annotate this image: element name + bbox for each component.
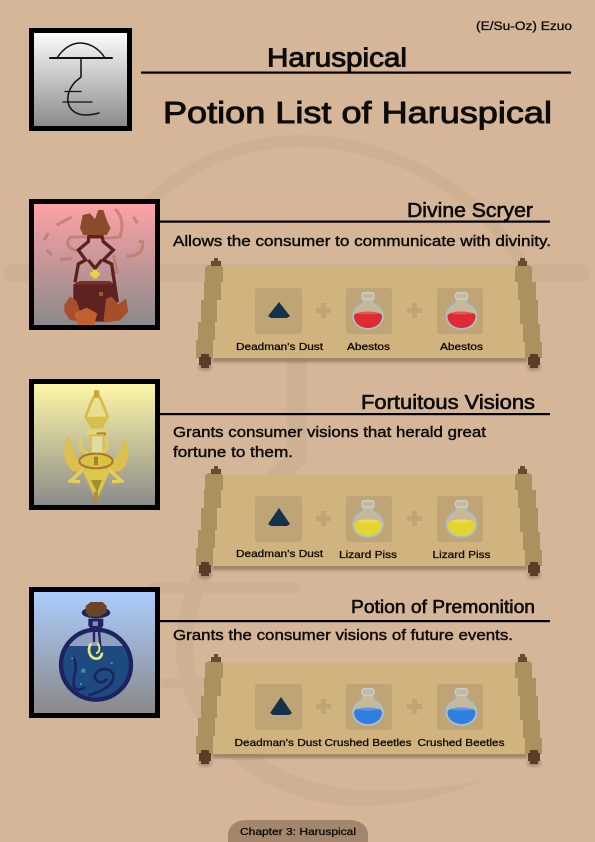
footer: chapter tab	[228, 820, 368, 842]
label: Lizard Piss: Lizard Piss	[339, 549, 397, 561]
icon: yellow flask 2	[446, 501, 476, 537]
heading: chapter title: Haruspical	[267, 44, 407, 72]
icon: red flask	[353, 293, 383, 329]
watermark: Haruspical symbol	[4, 141, 590, 806]
icon: Haruspical sigil	[32, 30, 130, 128]
author tag: (E/Su-Oz) Ezuo	[476, 21, 572, 33]
icon: dust pile	[268, 302, 290, 318]
icon: blue flask	[353, 689, 383, 725]
label: Deadman's Dust: Deadman's Dust	[236, 548, 323, 560]
icon: yellow flask	[353, 501, 383, 537]
icon: red flask 2	[446, 293, 476, 329]
recipe scroll: Potion of Premonition	[196, 654, 542, 766]
text: Potion of Premonition description: Grants the consumer visions of future events.	[173, 628, 513, 644]
text: Fortuitous Visions description: fortune to them.	[173, 445, 293, 461]
icon: blue flask 2	[446, 689, 476, 725]
label: Crushed Beetles 2: Crushed Beetles	[418, 737, 504, 749]
label: Deadman's Dust: Deadman's Dust	[236, 341, 323, 353]
icon: cauldron figure	[32, 202, 158, 328]
label: Abestos: Abestos	[347, 341, 390, 353]
heading: Fortuitous Visions: Fortuitous Visions	[361, 392, 535, 414]
icon: dust pile	[268, 508, 290, 526]
text: Fortuitous Visions description	[173, 425, 486, 461]
label: Lizard Piss 2: Lizard Piss	[432, 549, 490, 561]
recipe scroll: Divine Scryer	[196, 258, 542, 370]
heading: page title: Potion List of Haruspical	[163, 95, 552, 130]
panel: Potion of Premonition	[32, 590, 550, 766]
icon: moon potion bottle	[32, 590, 158, 716]
panel: Fortuitous Visions	[32, 382, 550, 578]
heading: Divine Scryer: Divine Scryer	[407, 200, 533, 222]
label: Deadman's Dust: Deadman's Dust	[234, 737, 322, 749]
panel: Divine Scryer	[32, 200, 551, 370]
icon: dust pile	[270, 697, 292, 715]
label: Crushed Beetles: Crushed Beetles	[324, 737, 412, 749]
text: Fortuitous Visions description: Grants consumer visions that herald great	[173, 425, 486, 441]
text: Divine Scryer description: Allows the consumer to communicate with divinity.	[173, 234, 551, 250]
heading: Potion of Premonition: Potion of Premonition	[351, 596, 535, 617]
icon: golden eye amulet	[32, 382, 158, 508]
footer: chapter tab: Chapter 3: Haruspical	[240, 826, 356, 838]
recipe scroll: Fortuitous Visions	[196, 466, 542, 578]
label: Abestos 2: Abestos	[440, 341, 483, 353]
